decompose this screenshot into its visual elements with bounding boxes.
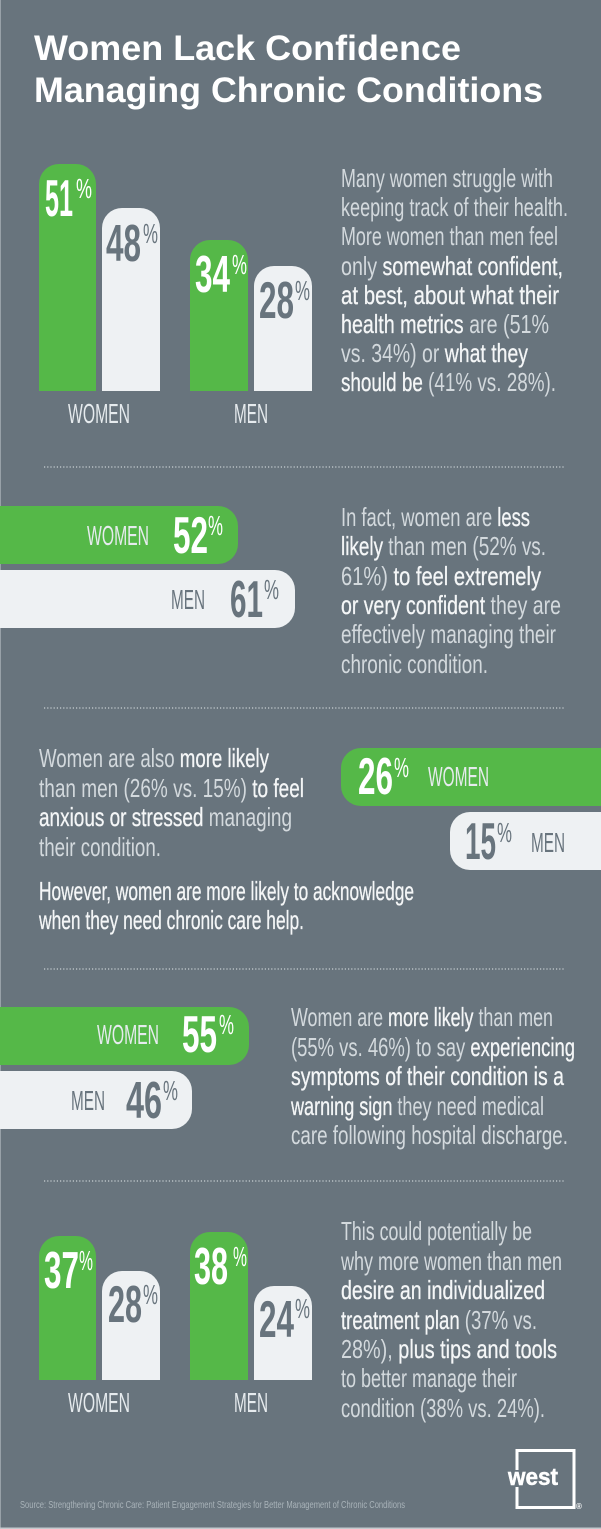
bar chart: metrics confidence: WOMEN: [68, 398, 130, 429]
text block: warning sign: [290, 1002, 575, 1150]
bar chart: metrics confidence: MEN: [234, 398, 268, 429]
horizontal bars: anxious: 26: [358, 748, 393, 806]
horizontal bars: extremely confident: %: [208, 510, 223, 541]
title: Women Lack Confidence: [34, 29, 461, 68]
text block: less likely: 61%) to feel extremely: [341, 561, 541, 591]
horizontal bars: extremely confident: WOMEN: [87, 520, 149, 551]
text block: keeping track: [341, 163, 568, 397]
bar chart: metrics confidence: [39, 164, 312, 429]
horizontal bars: warning sign: WOMEN: [97, 1019, 159, 1050]
text block: keeping track: health metrics are (51%: [341, 309, 549, 339]
horizontal bars: warning sign: %: [219, 1009, 234, 1040]
text block: less likely: or very confident they are: [341, 590, 561, 620]
text block: individualized plan: 28%), plus tips and tools: [341, 1334, 557, 1364]
horizontal bars: anxious: %: [497, 817, 512, 848]
horizontal bars: extremely confident: %: [264, 574, 279, 605]
text block: less likely: likely than men (52% vs.: [341, 531, 546, 561]
text block: anxious or stressed: their condition.: [39, 832, 161, 862]
text block: anxious or stressed: [39, 743, 304, 862]
text block: anxious or stressed: than men (26% vs. 15%) to feel: [39, 773, 304, 803]
bar chart: individualized plan and tips: [39, 1232, 312, 1418]
bar chart: metrics confidence: 34: [195, 246, 230, 304]
horizontal bars: warning sign: 46: [126, 1072, 162, 1130]
horizontal bars: warning sign: MEN: [71, 1085, 105, 1116]
text block: individualized plan: [340, 1216, 562, 1423]
callout: women acknowledge need for help: when they need chronic care help.: [38, 905, 304, 935]
title: Managing Chronic Conditions: [34, 71, 543, 110]
bar chart: individualized plan and tips: WOMEN: [68, 1387, 130, 1418]
bar chart: metrics confidence: 51: [45, 170, 73, 228]
bar chart: metrics confidence: 28: [259, 272, 294, 330]
text block: less likely: [341, 502, 561, 679]
logo: west: ®: [576, 1502, 582, 1511]
bar chart: individualized plan and tips: 28: [108, 1276, 142, 1334]
horizontal bars: anxious: WOMEN: [428, 761, 489, 792]
logo: west: [507, 1450, 582, 1511]
horizontal bars: anxious: MEN: [531, 827, 565, 858]
horizontal bars: warning sign: %: [163, 1075, 178, 1106]
text block: less likely: chronic condition.: [341, 649, 488, 679]
bar chart: metrics confidence: 48: [106, 215, 141, 273]
bar chart: individualized plan and tips: %: [233, 1241, 247, 1272]
source note: Source: Strengthening Chronic Care: Patient Engagement Strategies for Better Management of Chronic Conditions: [20, 1499, 405, 1511]
horizontal bars: extremely confident: MEN: [171, 584, 205, 615]
horizontal bars: extremely confident: 52: [173, 507, 208, 565]
callout: women acknowledge need for help: [38, 876, 414, 935]
horizontal bars: anxious: [341, 748, 601, 871]
horizontal bars: extremely confident: 61: [230, 571, 263, 629]
text block: individualized plan: to better manage their: [341, 1363, 517, 1393]
bar chart: individualized plan and tips: %: [79, 1245, 93, 1276]
callout: women acknowledge need for help: However, women are more likely to acknowledge: [39, 876, 414, 906]
title: [34, 29, 543, 110]
text block: individualized plan: treatment plan (37% vs.: [341, 1305, 537, 1335]
bar chart: individualized plan and tips: MEN: [234, 1387, 268, 1418]
bar chart: metrics confidence: %: [76, 173, 92, 204]
horizontal bars: anxious: %: [394, 752, 409, 783]
bar chart: metrics confidence: %: [295, 275, 310, 306]
text block: keeping track: vs. 34%) or what they: [341, 338, 528, 368]
horizontal bars: warning sign: 55: [182, 1006, 217, 1064]
text block: less likely: In fact, women are less: [341, 502, 530, 532]
logo: west: west: [507, 1464, 558, 1491]
horizontal bars: warning sign: [0, 1006, 249, 1130]
bar chart: individualized plan and tips: 24: [259, 1291, 294, 1349]
horizontal bars: extremely confident: [0, 506, 295, 629]
text block: anxious or stressed: Women are also more likely: [39, 743, 269, 773]
horizontal bars: anxious: 15: [465, 813, 496, 871]
bar chart: individualized plan and tips: 37: [44, 1242, 79, 1300]
text block: keeping track: should be (41% vs. 28%).: [341, 367, 556, 397]
bar chart: metrics confidence: %: [232, 249, 247, 280]
text block: warning sign: Women are more likely than men: [291, 1002, 553, 1032]
bar chart: individualized plan and tips: 38: [194, 1238, 228, 1296]
bar chart: metrics confidence: %: [143, 218, 158, 249]
bar chart: individualized plan and tips: %: [295, 1293, 310, 1324]
bar chart: individualized plan and tips: %: [143, 1279, 158, 1310]
text block: anxious or stressed: anxious or stressed managing: [39, 802, 292, 832]
